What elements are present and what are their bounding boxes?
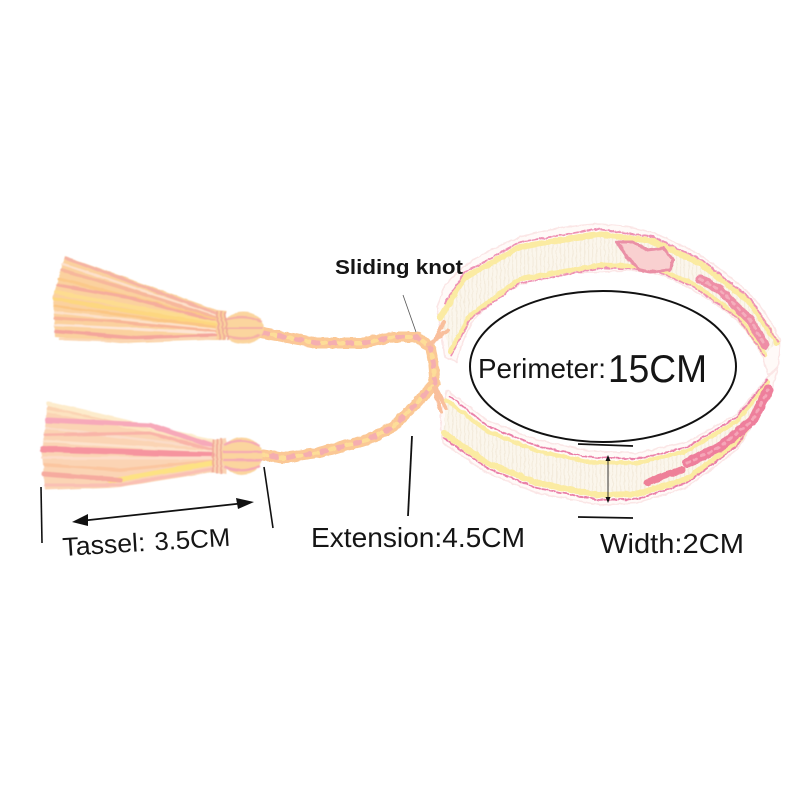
tassel label: Tassel:	[62, 527, 146, 562]
bottom tassel	[42, 402, 262, 490]
perimeter label	[478, 348, 707, 391]
woven heart motif	[617, 242, 673, 272]
width bottom tick	[578, 517, 633, 518]
lower band	[440, 367, 778, 505]
woven leaf motif bottom	[647, 390, 768, 483]
width arrow	[606, 455, 610, 503]
extension label: Extension:4.5CM	[311, 522, 525, 553]
perimeter ellipse	[470, 291, 736, 442]
sliding knot label: Sliding knot	[335, 257, 463, 279]
tassel right tick	[264, 467, 273, 528]
woven leaf motif right	[700, 279, 765, 345]
bracelet band	[437, 224, 780, 505]
tassel label	[62, 522, 231, 562]
perimeter label: 15CM	[608, 348, 707, 391]
tassel label: 3.5CM	[153, 524, 231, 556]
sliding knot leader	[403, 295, 416, 332]
tassel arrow	[72, 498, 254, 526]
perimeter label: Perimeter:	[478, 353, 606, 384]
tassel left tick	[41, 487, 42, 543]
width top tick	[578, 444, 633, 446]
extension tick	[408, 436, 412, 516]
upper band	[437, 224, 780, 375]
cord	[263, 322, 448, 458]
width label: Width:2CM	[600, 528, 744, 559]
top tassel	[53, 256, 264, 344]
